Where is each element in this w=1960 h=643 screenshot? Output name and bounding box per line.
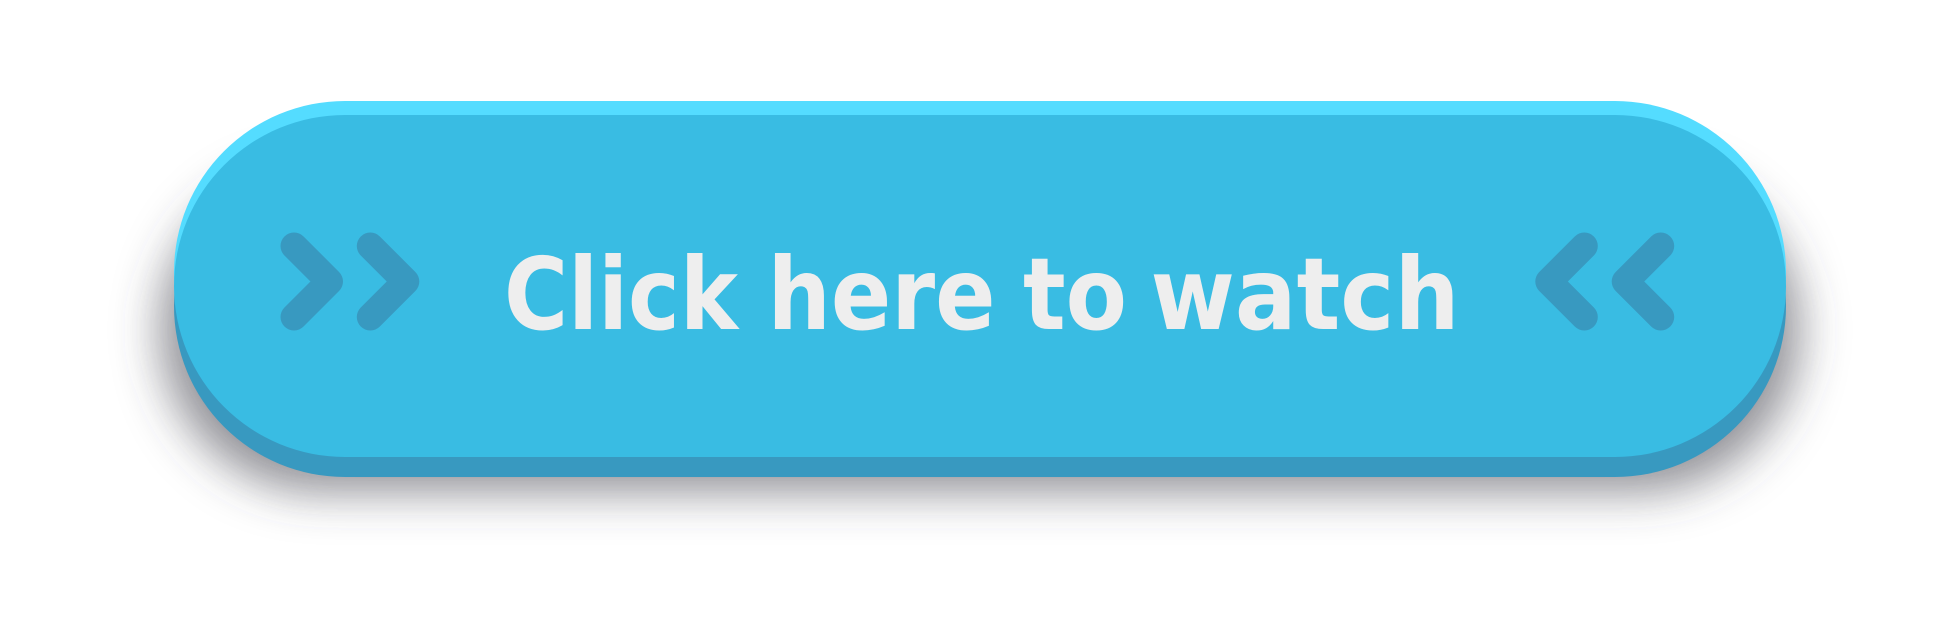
icon: left double chevron — [294, 246, 406, 317]
button bottom edge — [174, 135, 1786, 477]
button label — [504, 236, 1460, 353]
button drop shadow — [160, 168, 1800, 492]
button label: to — [1023, 236, 1127, 353]
button label: Click — [504, 236, 740, 353]
button face — [174, 115, 1786, 457]
button label: here — [768, 236, 996, 353]
icon: right double chevron — [1549, 246, 1661, 317]
button label: watch — [1150, 236, 1460, 353]
button top highlight — [174, 101, 1786, 443]
